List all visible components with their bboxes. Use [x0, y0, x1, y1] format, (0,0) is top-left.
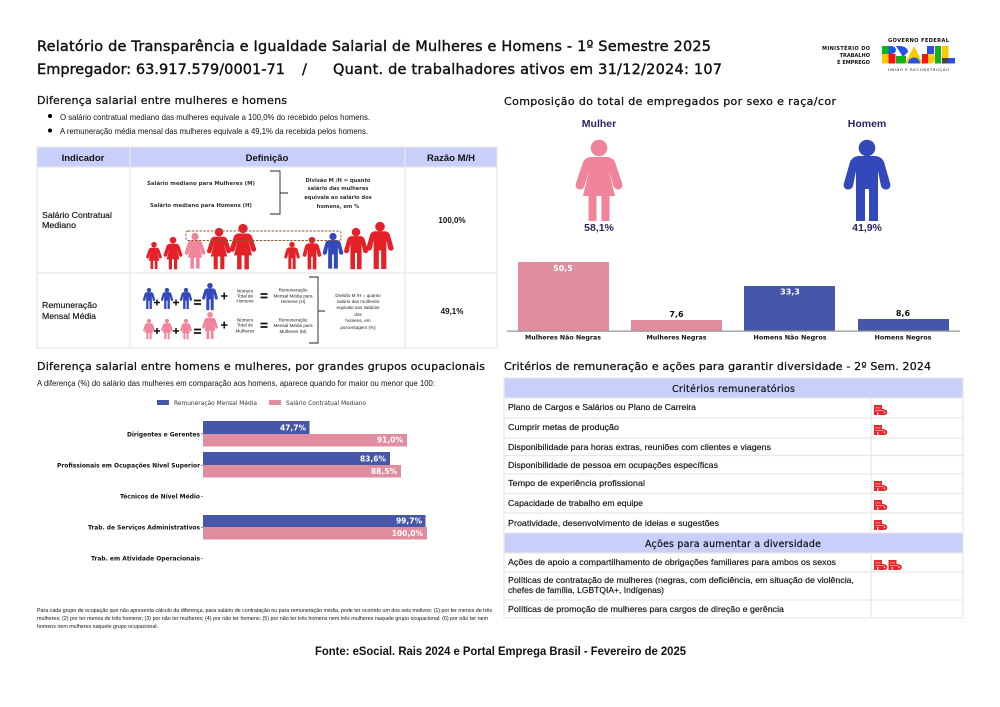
row: average monthly pay: equivale aos salários	[337, 305, 380, 310]
row: average monthly pay: Homens	[236, 298, 254, 304]
bar chart: sex and race composition: Homens Não Negros	[754, 334, 827, 342]
people line-up	[146, 222, 394, 269]
icon: woman share	[576, 118, 622, 234]
heading: salary difference: Diferença salarial entre mulheres e homens	[37, 94, 287, 107]
bar chart: occupational groups: Técnicos de Nível Médio	[120, 492, 201, 500]
footnote: homens nem mulheres naquele grupo ocupacional.	[37, 624, 158, 630]
panel: criteria table	[504, 378, 963, 618]
bar chart: sex and race composition: 33,3	[780, 288, 800, 296]
row: contractual salary: Salário mediano para Mulheres (M)	[147, 180, 255, 187]
row: contractual salary: Divisão M /H = quanto	[305, 178, 371, 184]
heading: occupational groups: Diferença salarial entre homens e mulheres, por grandes grupos ocupacionais	[37, 360, 485, 373]
bar chart: occupational groups	[57, 421, 427, 562]
bar chart: sex and race composition: 50,5	[553, 264, 573, 273]
icon: woman share: 58,1%	[584, 222, 615, 234]
panel: criteria table: Plano de Cargos e Salários ou Plano de Carreira	[508, 402, 696, 412]
ministry label: E EMPREGO	[837, 60, 870, 66]
bar chart: occupational groups: 83,6%	[360, 454, 386, 464]
bullet list: A remuneração média mensal das mulheres equivale a 49,1% da recebida pelos homens.	[60, 126, 368, 136]
bar chart: occupational groups: 99,7%	[396, 516, 422, 526]
panel: criteria table: Disponibilidade para horas extras, reuniões com clientes e viagens	[508, 442, 771, 452]
row: average monthly pay: Divisão M /H = quanto	[335, 293, 381, 298]
bar chart: occupational groups: Trab. de Serviços Administrativos	[88, 524, 200, 532]
table header: Razão M/H	[427, 153, 475, 164]
icons: criteria marks	[874, 405, 902, 570]
table header	[37, 147, 497, 167]
bar chart: occupational groups: Profissionais em Ocupações Nível Superior	[57, 462, 201, 470]
bar chart: occupational groups: 91,0%	[377, 436, 403, 444]
bullet list	[48, 112, 370, 136]
row: average monthly pay: Mulheres (M)	[279, 329, 307, 334]
chart legend: Salário Contratual Mediano	[286, 400, 366, 407]
title: Quant. de trabalhadores ativos em 31/12/2024: 107	[333, 62, 722, 78]
chart legend: Remuneração Mensal Média	[174, 400, 257, 407]
icon: man share: Homem	[848, 118, 886, 130]
row: average monthly pay	[42, 277, 463, 343]
row: contractual salary: 100,0%	[438, 216, 466, 225]
table header: Indicador	[62, 153, 105, 164]
row: average monthly pay: Remuneração	[42, 300, 97, 310]
bar chart: occupational groups: Dirigentes e Gerentes	[127, 432, 200, 438]
row: average monthly pay: Mensal Média	[42, 311, 96, 321]
ministry label: TRABALHO	[840, 53, 870, 59]
bar chart: sex and race composition: Mulheres Não Negras	[525, 334, 601, 342]
row: average monthly pay: Remuneração	[279, 288, 308, 292]
heading: composition: Composição do total de empregados por sexo e raça/cor	[504, 95, 836, 108]
bar chart: sex and race composition: 7,6	[669, 310, 684, 319]
bar chart: occupational groups: 88,5%	[371, 467, 397, 476]
row: contractual salary	[42, 171, 466, 269]
panel: criteria table: Ações de apoio a compartilhamento de obrigações familiares para ambos os sexos	[508, 557, 836, 567]
subtitle text: A diferença (%) do salário das mulheres em comparação aos homens, aparece quando for maior ou menor que 100:	[37, 378, 435, 388]
bar chart: occupational groups: 100,0%	[392, 529, 423, 538]
title: Empregador: 63.917.579/0001-71	[37, 62, 285, 78]
panel: criteria table: Políticas de promoção de mulheres para cargos de direção e gerência	[508, 604, 784, 614]
row: average monthly pay: 49,1%	[441, 307, 463, 316]
row: average monthly pay: salário das mulheres	[337, 299, 380, 304]
bullet list: O salário contratual mediano das mulheres equivale a 100,0% do recebido pelos homens.	[60, 112, 370, 122]
ministry label	[822, 44, 870, 66]
table header: Definição	[246, 153, 289, 164]
title	[37, 39, 722, 78]
government logo	[882, 38, 955, 72]
row: contractual salary: Salário Contratual	[42, 210, 112, 220]
row: contractual salary: equivale ao salário dos	[304, 194, 372, 201]
panel: criteria table: Políticas de contratação de mulheres (negras, com deficiência, em situação de violência,	[508, 575, 854, 585]
row: average monthly pay: Mulheres	[236, 328, 255, 334]
section header: diversity: Ações para aumentar a diversidade	[645, 539, 821, 550]
footnote: Para cada grupo de ocupação que não apresenta cálculo da diferença, para salário de contratação ou para remuneração média, pode ter ocorrido um dos seis motivos: (1) por ter menos de três	[37, 608, 492, 614]
icon: man share	[844, 118, 890, 234]
row: average monthly pay: Homens (H)	[281, 299, 306, 304]
chart legend	[157, 400, 366, 407]
icon: woman share: Mulher	[582, 118, 616, 130]
panel: indicators table	[37, 147, 497, 348]
footnote	[37, 608, 492, 630]
row: contractual salary: salário das mulheres	[308, 185, 368, 192]
row: average monthly pay: porcentagem (%)	[340, 325, 376, 330]
bar chart: sex and race composition	[507, 262, 960, 342]
panel: criteria table: chefes de família, LGBTQIA+, Indígenas)	[508, 585, 664, 595]
row: average monthly pay: Número	[237, 288, 254, 294]
heading: criteria: Critérios de remuneração e ações para garantir diversidade - 2º Sem. 2024	[504, 360, 931, 373]
source line: Fonte: eSocial. Rais 2024 e Portal Emprega Brasil - Fevereiro de 2025	[315, 646, 687, 658]
bar chart: sex and race composition: Mulheres Negras	[646, 334, 707, 342]
title: /	[302, 62, 307, 78]
icon: man share: 41,9%	[852, 222, 883, 234]
panel: criteria table: Tempo de experiência profissional	[508, 478, 645, 488]
section header: criteria: Critérios remuneratórios	[672, 384, 795, 395]
row: average monthly pay: Mensal Média para	[273, 294, 313, 298]
bar chart: occupational groups: Trab. em Atividade Operacionais	[91, 556, 200, 562]
row: average monthly pay: Remuneração	[279, 318, 308, 322]
footnote: mulheres; (2) por ter menos de três homens; (3) por não ter mulheres; (4) por não ter homens; (5) por não ter três homens nem três mulheres naquele grupo ocupacional; (6) por não ter nem	[37, 616, 488, 622]
row: average monthly pay: Mensal Média para	[273, 323, 313, 328]
panel: criteria table: Capacidade de trabalho em equipe	[508, 498, 643, 508]
row: average monthly pay: homens, em	[345, 318, 371, 323]
panel: criteria table: Disponibilidade de pessoa em ocupações específicas	[508, 460, 718, 470]
title: Relatório de Transparência e Igualdade Salarial de Mulheres e Homens - 1º Semestre 2025	[37, 39, 711, 55]
row: average monthly pay: Número	[237, 318, 254, 322]
row: contractual salary: homens, em %	[317, 204, 360, 210]
row: average monthly pay: Total de	[237, 294, 253, 298]
bar chart: sex and race composition: Homens Negros	[874, 334, 932, 342]
row: average monthly pay: Total de	[237, 322, 253, 328]
row: contractual salary: Mediano	[42, 220, 76, 230]
government logo: GOVERNO FEDERAL	[888, 38, 950, 44]
bar chart: occupational groups: 47,7%	[280, 424, 306, 432]
panel: criteria table: Proatividade, desenvolvimento de ideias e sugestões	[508, 518, 719, 528]
panel: criteria table: Cumprir metas de produção	[508, 422, 619, 432]
row: average monthly pay: dos	[354, 312, 362, 317]
government logo: UNIÃO E RECONSTRUÇÃO	[888, 67, 949, 72]
ministry label: MINISTÉRIO DO	[822, 44, 870, 52]
bar chart: sex and race composition: 8,6	[896, 309, 911, 318]
row: contractual salary: Salário mediano para Homens (H)	[150, 202, 252, 209]
